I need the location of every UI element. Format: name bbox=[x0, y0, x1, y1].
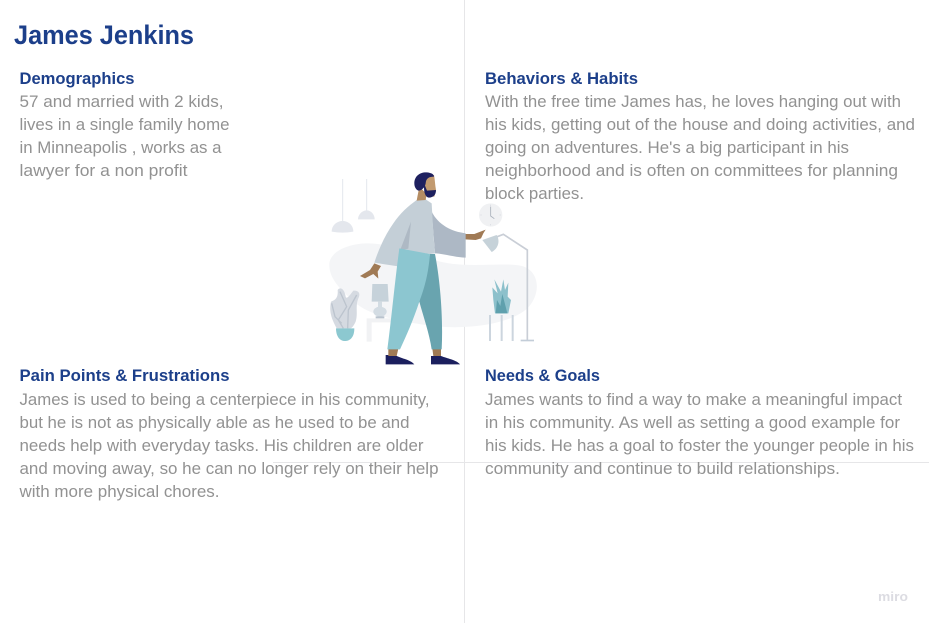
heading: demographics: Demographics bbox=[20, 70, 134, 88]
text block: pain points and frustrations: James is used to being a centerpiece in his community, bbox=[20, 391, 429, 409]
text block: pain points and frustrations: and moving away, so he can no longer rely on their help bbox=[20, 460, 438, 478]
head bbox=[414, 172, 436, 201]
text block: pain points and frustrations bbox=[18, 391, 438, 501]
text block: needs and goals: his kids. He has a goal to foster the younger people in his bbox=[485, 437, 914, 455]
text block: pain points and frustrations: with more physical chores. bbox=[18, 483, 219, 501]
left hand and sleeve bbox=[360, 199, 435, 279]
heading: needs and goals: Needs & Goals bbox=[485, 367, 600, 385]
text block: pain points and frustrations: but he is not as physically able as he used to be and bbox=[20, 414, 410, 432]
text block: demographics bbox=[20, 93, 229, 180]
text block: behaviors and habits: block parties. bbox=[485, 185, 584, 203]
text block: pain points and frustrations: needs help with everyday tasks. His children are older bbox=[20, 437, 424, 455]
text block: behaviors and habits: neighborhood and is often on committees for planning bbox=[485, 162, 898, 180]
illustration: man reaching for a lamp in a room bbox=[329, 172, 537, 364]
text block: needs and goals bbox=[485, 391, 914, 478]
watermark: miro: miro bbox=[878, 589, 908, 604]
figure: man bbox=[360, 172, 486, 364]
text block: demographics: 57 and married with 2 kids, bbox=[20, 93, 223, 111]
background blob bbox=[329, 243, 537, 327]
title: James Jenkins bbox=[14, 20, 194, 50]
right sleeve and hand bbox=[432, 212, 486, 258]
icon: wall clock bbox=[479, 203, 502, 227]
icon: plant on stool bbox=[489, 279, 514, 341]
text block: behaviors and habits: his kids, getting out of the house and doing activities, and bbox=[485, 116, 915, 134]
text block: behaviors and habits: going on adventures. He's a big participant in his bbox=[485, 139, 849, 157]
text block: needs and goals: in his community. As well as setting a good example for bbox=[485, 414, 901, 432]
text block: demographics: in Minneapolis , works as a bbox=[20, 139, 222, 157]
legs and shoes bbox=[386, 254, 460, 364]
text block: behaviors and habits: With the free time James has, he loves hanging out with bbox=[485, 93, 901, 111]
panel: needs and goals bbox=[485, 367, 914, 478]
text block: needs and goals: James wants to find a way to make a meaningful impact bbox=[485, 391, 902, 409]
text block: needs and goals: community and continue to build relationships. bbox=[485, 460, 840, 478]
heading: behaviors and habits: Behaviors & Habits bbox=[485, 70, 638, 88]
icon: floor lamp bbox=[482, 234, 534, 341]
icon: potted plant bbox=[330, 288, 359, 341]
text block: demographics: lawyer for a non profit bbox=[20, 162, 188, 180]
panel: behaviors and habits bbox=[485, 70, 915, 203]
front leg bbox=[387, 248, 430, 349]
text block: behaviors and habits bbox=[485, 93, 915, 203]
text block: demographics: lives in a single family home bbox=[20, 116, 229, 134]
panel: demographics bbox=[20, 70, 229, 180]
panel: pain points and frustrations bbox=[18, 367, 438, 501]
icon: side table with lamp bbox=[367, 284, 397, 342]
heading: pain points and frustrations: Pain Points & Frustrations bbox=[20, 367, 229, 385]
icon: pendant lamps bbox=[332, 179, 375, 233]
